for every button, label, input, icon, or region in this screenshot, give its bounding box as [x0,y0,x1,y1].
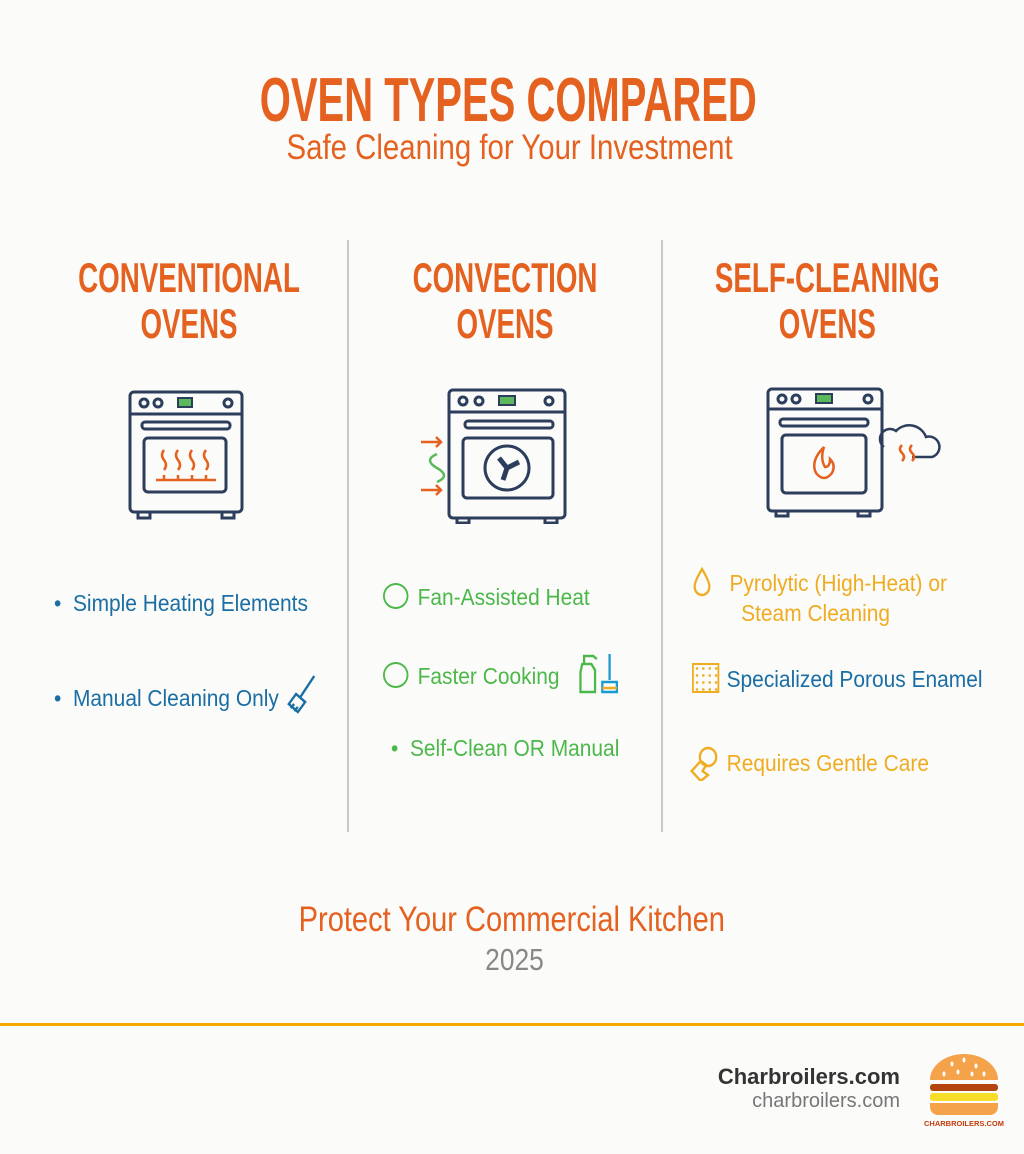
brand text: charbroilers.com [752,1090,900,1112]
panel: conventional [54,254,316,714]
logo: burger [924,1054,1004,1128]
bullet: gentle care: Requires Gentle Care [727,750,929,776]
heading: self-cleaning ovens: SELF-CLEANING [715,254,940,301]
panel: convection [383,254,619,761]
icon: self-cleaning oven [766,388,941,518]
heading: convection ovens: OVENS [456,300,554,347]
bullet: pyrolytic [694,567,947,626]
bullet: gentle care [690,746,929,781]
bullet: fan-assisted: Fan-Assisted Heat [418,584,590,610]
heading: self-cleaning ovens: OVENS [779,300,876,347]
subtitle: Safe Cleaning for Your Investment [287,128,733,167]
heading: conventional ovens [78,254,300,347]
title: OVEN TYPES COMPARED [260,66,756,135]
bullet: pyrolytic: Pyrolytic (High-Heat) or [729,570,947,596]
heading: self-cleaning ovens [715,254,940,347]
footer tagline: Protect Your Commercial Kitchen [299,900,725,939]
bullet: porous enamel: Specialized Porous Enamel [727,666,983,692]
bullet: faster cooking [383,654,618,694]
heading: convection ovens [413,254,597,347]
bullet: simple heating: • Simple Heating Elements [54,590,308,616]
bullet: manual cleaning [54,675,316,714]
brand text: Charbroilers.com [718,1064,900,1089]
heading: conventional ovens: CONVENTIONAL [78,254,300,301]
icon: conventional oven [128,390,244,520]
heading: convection ovens: CONVECTION [413,254,597,301]
heading: conventional ovens: OVENS [140,300,238,347]
year: 2025 [485,942,543,977]
bullet: self-clean or manual: • Self-Clean OR Manual [391,735,619,761]
logo: burger: CHARBROILERS.COM [924,1119,1004,1128]
icon: convection oven with fan [421,388,566,524]
panel: self-cleaning [690,254,983,781]
bullet: manual cleaning: • Manual Cleaning Only [54,685,279,711]
bullet: faster cooking: Faster Cooking [418,663,560,689]
bullet: pyrolytic: Steam Cleaning [741,600,890,626]
brand text [718,1064,900,1112]
